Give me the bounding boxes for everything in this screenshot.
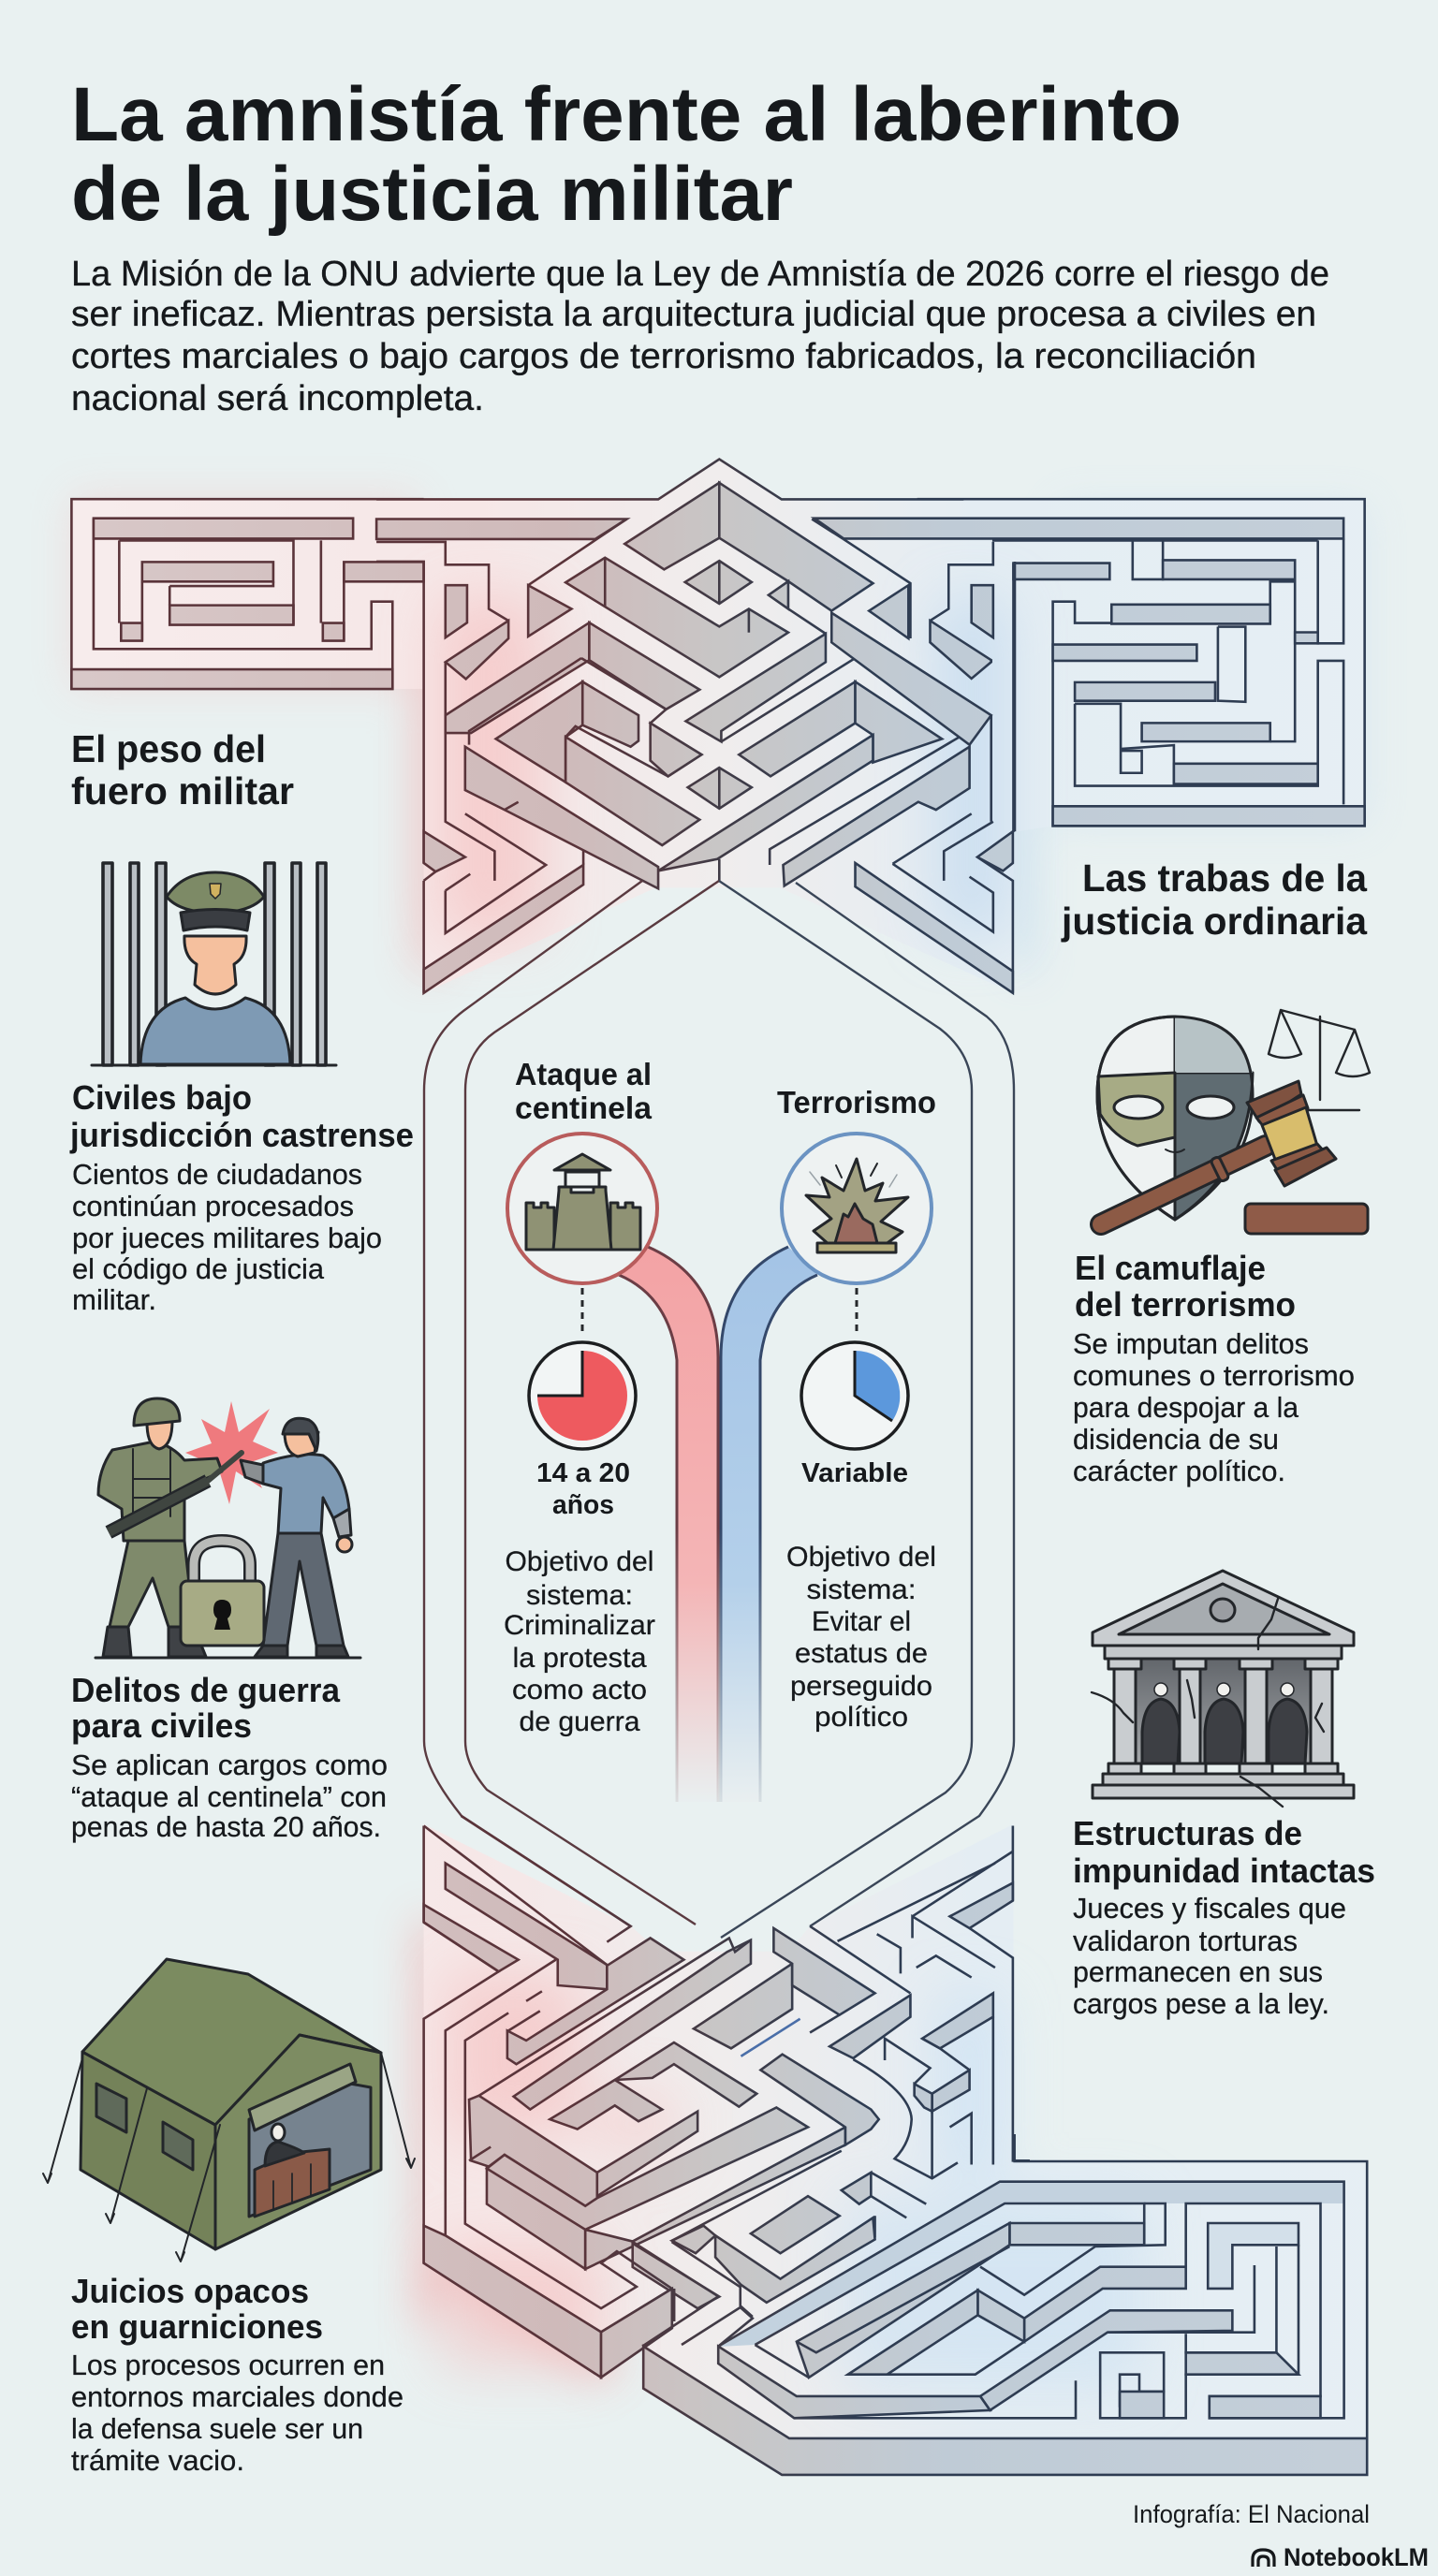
icon: explosion in circle — [782, 1134, 932, 1283]
heading: ataque al centinela — [515, 1057, 653, 1125]
panel: right section heading — [1061, 856, 1368, 943]
blue stream — [721, 1247, 817, 1802]
heading: impunidad intactas — [1073, 1852, 1375, 1890]
heading: ataque al centinela: centinela — [515, 1090, 653, 1125]
icon: soldier, civilian, padlock — [95, 1398, 360, 1658]
body text: Los procesos ocurren en — [71, 2349, 385, 2381]
dashed connector red — [580, 1288, 584, 1332]
panel: left section heading: El peso del — [71, 727, 266, 770]
value: variable: Variable — [801, 1458, 908, 1488]
body text: objetivo red: la protesta — [513, 1643, 647, 1674]
title: La amnistía frente al laberinto — [71, 72, 1181, 157]
panel: estructuras de impunidad intactas — [1073, 1571, 1375, 2020]
body text: carácter político. — [1073, 1455, 1285, 1487]
maze: bottom right wing — [633, 2134, 1367, 2475]
body text — [1073, 1327, 1355, 1487]
panel: juicios opacos en guarniciones — [43, 1959, 415, 2477]
body text: objetivo red — [504, 1546, 655, 1737]
maze: top left and right wings — [71, 499, 1365, 832]
body text: el código de justicia — [72, 1252, 325, 1285]
body text: para despojar a la — [1073, 1391, 1299, 1424]
body text: comunes o terrorismo — [1073, 1359, 1355, 1392]
body text: Se aplican cargos como — [71, 1749, 388, 1781]
intro text: nacional será incompleta. — [71, 379, 484, 418]
body text: Jueces y fiscales que — [1073, 1892, 1346, 1925]
heading: Estructuras de — [1073, 1814, 1302, 1852]
value: 14 a 20 anos — [536, 1458, 630, 1520]
panel: right section heading: Las trabas de la — [1082, 856, 1368, 900]
body text: objetivo red: de guerra — [519, 1706, 640, 1737]
intro text: cortes marciales o bajo cargos de terrorismo fabricados, la reconciliación — [71, 337, 1256, 376]
body text: trámite vacio. — [71, 2444, 244, 2477]
body text: objetivo red: Criminalizar — [504, 1610, 655, 1641]
body text: disidencia de su — [1073, 1423, 1279, 1456]
maze: top centre — [376, 460, 1015, 993]
heading — [71, 1671, 341, 1745]
body text: objetivo red: como acto — [512, 1675, 647, 1705]
body text — [71, 1749, 388, 1843]
body text — [1073, 1892, 1346, 2020]
body text: objetivo blue: sistema: — [807, 1574, 916, 1605]
heading: Civiles bajo — [72, 1078, 252, 1117]
intro text — [71, 255, 1329, 418]
maze: bottom centre — [424, 1816, 1030, 2378]
maze: top hull — [71, 458, 1365, 993]
heading — [69, 1078, 414, 1154]
intro text: ser ineficaz. Mientras persista la arquitectura judicial que procesa a civiles en — [71, 295, 1316, 334]
title: de la justicia militar — [71, 152, 793, 237]
body text — [72, 1158, 382, 1316]
intro text: La Misión de la ONU advierte que la Ley de Amnistía de 2026 corre el riesgo de — [71, 255, 1329, 294]
icon: fortress in circle — [507, 1134, 657, 1283]
glow: outer maze halos — [71, 496, 1367, 2382]
body text: Cientos de ciudadanos — [72, 1158, 362, 1191]
heading: Delitos de guerra — [71, 1671, 341, 1709]
brand: NotebookLM — [1284, 2543, 1429, 2571]
panel: left section heading — [71, 727, 294, 812]
heading: Juicios opacos — [71, 2272, 309, 2310]
icon: soldier behind bars — [92, 863, 336, 1065]
heading — [71, 2272, 323, 2346]
panel: centre comparison — [504, 1057, 936, 1802]
heading — [1073, 1814, 1375, 1890]
icon: mask, gavel and scales — [1097, 1010, 1370, 1234]
heading: para civiles — [71, 1706, 252, 1745]
heading: ataque al centinela: Ataque al — [515, 1057, 652, 1091]
body text: penas de hasta 20 años. — [71, 1810, 381, 1843]
chart: pie clock variable — [801, 1342, 908, 1449]
value: 14 a 20 anos: años — [552, 1490, 614, 1520]
heading: del terrorismo — [1075, 1285, 1296, 1324]
heading: terrorismo: Terrorismo — [777, 1085, 936, 1120]
body text: por jueces militares bajo — [72, 1222, 382, 1254]
panel: delitos de guerra para civiles — [71, 1398, 388, 1843]
body text: objetivo blue: Objetivo del — [786, 1542, 936, 1573]
icon: military tent — [43, 1959, 415, 2261]
body text: la defensa suele ser un — [71, 2412, 363, 2445]
value: 14 a 20 anos: 14 a 20 — [536, 1458, 630, 1488]
heading: El camuflaje — [1075, 1249, 1266, 1287]
panel: left section heading: fuero militar — [71, 769, 294, 812]
icon: cracked courthouse with judges — [1092, 1571, 1354, 1807]
body text: objetivo blue: político — [814, 1702, 908, 1733]
body text: validaron torturas — [1073, 1925, 1298, 1957]
panel: right section heading: justicia ordinaria — [1061, 900, 1368, 943]
body text: objetivo red: Objetivo del — [506, 1546, 653, 1577]
maze: hexagonal corridor outline — [424, 881, 1014, 1938]
heading: jurisdicción castrense — [69, 1116, 414, 1154]
heading: en guarniciones — [71, 2307, 323, 2346]
body text: militar. — [72, 1283, 156, 1316]
red stream — [619, 1247, 718, 1802]
body text: Se imputan delitos — [1073, 1327, 1309, 1360]
body text: continúan procesados — [72, 1190, 354, 1222]
body text: “ataque al centinela” con — [71, 1780, 387, 1813]
body text — [71, 2349, 404, 2477]
maze: bottom hull — [424, 1824, 1367, 2475]
panel: el camuflaje del terrorismo — [1073, 1010, 1370, 1487]
chart: pie clock 14 a 20 anos — [529, 1342, 636, 1449]
maze: bottom right top bar — [718, 2182, 1344, 2347]
body text: objetivo blue: perseguido — [790, 1671, 932, 1702]
body text: objetivo blue: Evitar el — [812, 1606, 911, 1637]
credit: Infografía: El Nacional — [1133, 2500, 1370, 2528]
glow: inner maze tints — [440, 599, 1142, 2387]
body text: objetivo red: sistema: — [526, 1580, 633, 1611]
dashed connector blue — [856, 1288, 858, 1332]
panel: civiles bajo jurisdiccion castrense — [69, 863, 414, 1316]
body text: cargos pese a la ley. — [1073, 1987, 1329, 2020]
title — [71, 72, 1181, 237]
body text: objetivo blue: estatus de — [795, 1638, 928, 1669]
heading — [1075, 1249, 1296, 1324]
body text: objetivo blue — [786, 1542, 936, 1733]
body text: entornos marciales donde — [71, 2380, 404, 2413]
body text: permanecen en sus — [1073, 1955, 1323, 1988]
icon: notebooklm logo — [1253, 2550, 1274, 2567]
